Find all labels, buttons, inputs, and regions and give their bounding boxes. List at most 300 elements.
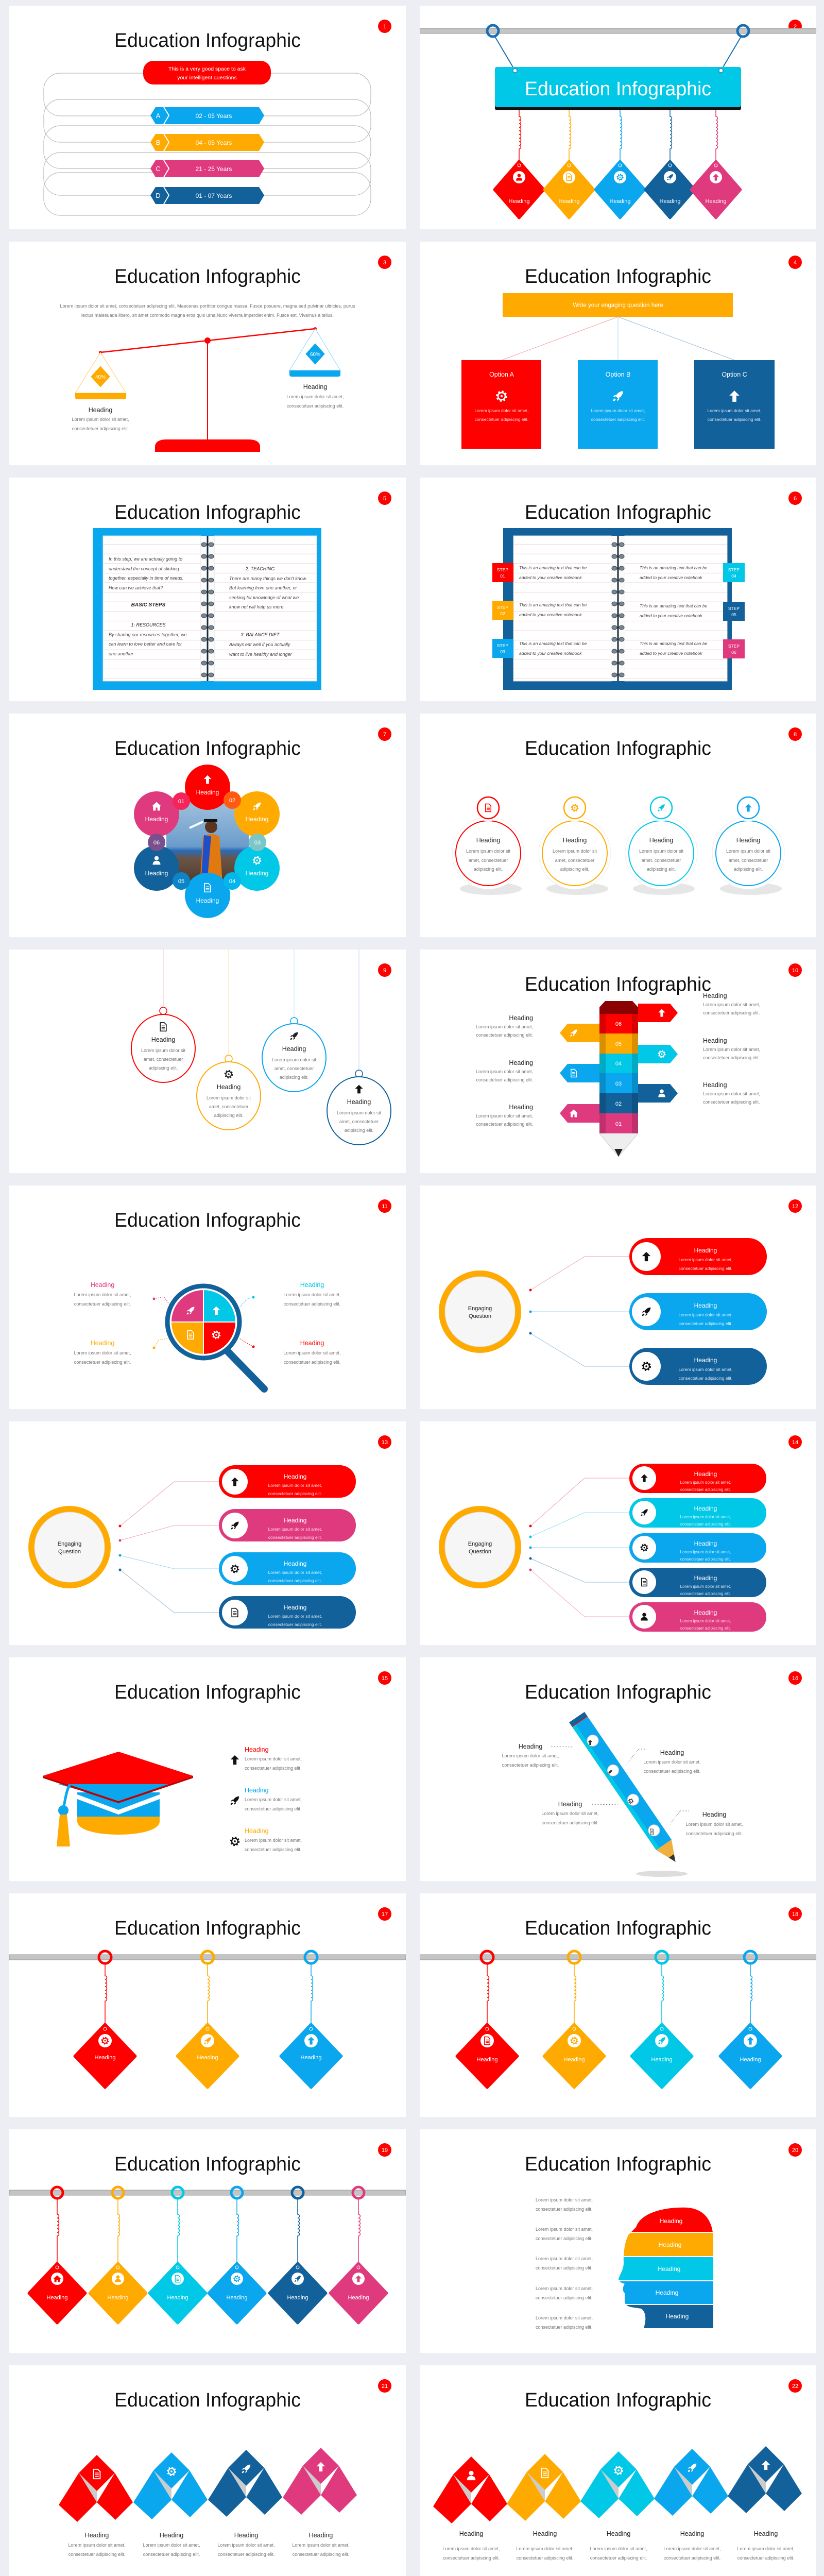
hanging circle 4 dark blue: amet, consectetuer	[339, 1119, 379, 1124]
captions: Lorem ipsum dolor sit amet,	[737, 2546, 795, 2551]
pencil body: 05	[615, 1041, 622, 1047]
rod	[9, 1955, 406, 1960]
title: Education Infographic	[525, 266, 711, 287]
label C: 21 - 25 Years	[196, 165, 232, 173]
step texts: This is an amazing text that can be	[640, 641, 708, 646]
tag 1 red	[494, 110, 544, 218]
callout left 2: Lorem ipsum dolor sit amet,	[541, 1811, 599, 1816]
tag blue: Heading	[301, 2055, 321, 2061]
label A	[150, 107, 264, 124]
connector lines	[502, 317, 734, 360]
intro paragraph: lectus malesuada libero, sit amet commodo magna eros quis urna.Nunc viverra imperdiet enim. Fusce est. Vivamus a tellus.	[81, 313, 334, 318]
slide 9: hanging circles	[9, 950, 406, 1173]
question circle	[439, 1270, 521, 1353]
badge 5: 5	[383, 496, 386, 502]
captions: Heading	[160, 2532, 183, 2539]
pill 3 light blue: consectetuer adipiscing elit.	[268, 1578, 322, 1583]
pencil	[569, 1712, 683, 1867]
hanging circle 4 dark blue: Lorem ipsum dolor sit	[337, 1110, 382, 1115]
pill 5 pink: consectetuer adipiscing elit.	[680, 1626, 731, 1631]
notebook	[93, 528, 321, 690]
circle card 4 blue: Lorem ipsum dolor sit	[726, 849, 771, 854]
step texts: added to your creative notebook	[640, 575, 702, 580]
step tabs right: STEP	[728, 606, 740, 611]
pill 2 cyan	[629, 1498, 766, 1528]
badge 9: 9	[383, 968, 386, 974]
petal right-top orange	[234, 791, 280, 837]
badge 16	[788, 1671, 802, 1685]
slide 22: five ribbons	[420, 2365, 816, 2576]
step tabs left: 01	[500, 573, 505, 579]
petal top red	[185, 765, 230, 810]
hanging circle 3 blue	[262, 950, 326, 1092]
pencil shadow	[636, 1871, 688, 1877]
title: Education Infographic	[114, 2154, 301, 2175]
captions: consectetuer adipiscing elit.	[68, 2552, 125, 2557]
step tabs right: 04	[731, 573, 736, 579]
question pill: This is a very good space to ask	[168, 66, 246, 72]
captions: consectetuer adipiscing elit.	[664, 2555, 720, 2561]
captions: consectetuer adipiscing elit.	[293, 2552, 349, 2557]
hanging circle 1 red	[131, 950, 195, 1082]
pill 4 dark blue: Heading	[694, 1574, 717, 1582]
pill 2 pink: Lorem ipsum dolor sit amet,	[268, 1527, 322, 1532]
captions: Heading	[533, 2530, 557, 2537]
right page text: want to live healthy and longer	[229, 652, 293, 657]
left texts	[476, 1014, 533, 1127]
pill 4 dark blue: Lorem ipsum dolor sit amet,	[680, 1584, 731, 1589]
circle card 2 orange	[539, 794, 611, 895]
pill 3 light blue	[629, 1533, 766, 1563]
step texts	[519, 565, 708, 656]
option B: consectetuer adipiscing elit.	[591, 417, 645, 422]
callout right 2: Heading	[702, 1811, 726, 1818]
pill 3 light blue: Heading	[694, 1540, 717, 1547]
item 2	[231, 1787, 302, 1811]
label B	[150, 134, 264, 151]
step texts: This is an amazing text that can be	[640, 603, 708, 608]
hanging circle 1 red: amet, consectetuer	[144, 1057, 183, 1062]
callout right 1	[626, 1749, 701, 1774]
tag cyan	[631, 1951, 692, 2088]
title: Education Infographic	[525, 2154, 711, 2175]
pill 4 dark blue: consectetuer adipiscing elit.	[680, 1591, 731, 1596]
pill 4 dark blue: consectetuer adipiscing elit.	[268, 1622, 322, 1627]
badge 1: 1	[383, 24, 386, 30]
slide 12: engaging question 3	[420, 1185, 816, 1409]
pill 2 light blue	[629, 1293, 767, 1330]
step texts: This is an amazing text that can be	[519, 641, 587, 646]
scale beam and stand	[99, 327, 317, 452]
captions: Lorem ipsum dolor sit amet,	[516, 2546, 574, 2551]
side texts: Lorem ipsum dolor sit amet,	[536, 2256, 593, 2261]
petal left-top pink: Heading	[145, 816, 168, 823]
slide 17: three hanging tags	[9, 1893, 406, 2117]
callout right 1: Lorem ipsum dolor sit amet,	[643, 1759, 701, 1765]
captions	[68, 2532, 350, 2557]
slide 4: question options	[420, 242, 816, 465]
option C: consectetuer adipiscing elit.	[708, 417, 761, 422]
captions: Heading	[680, 2530, 704, 2537]
right pan 60%: Heading	[303, 383, 327, 391]
badge 9	[378, 963, 391, 977]
tag 6 pink: Heading	[348, 2295, 369, 2301]
title: Education Infographic	[114, 1682, 301, 1703]
option A: Lorem ipsum dolor sit amet,	[475, 408, 528, 413]
circle card 4 blue: amet, consectetuer	[729, 858, 768, 863]
head bands: Heading	[658, 2265, 680, 2273]
hanging circle 3 blue: Heading	[282, 1045, 306, 1053]
pill 4 dark blue	[629, 1568, 766, 1597]
badge 15: 15	[382, 1675, 388, 1682]
badge 1	[378, 20, 391, 33]
badge 17	[378, 1907, 391, 1921]
title: Education Infographic	[525, 738, 711, 759]
pill 1 red	[629, 1464, 766, 1493]
photo graduate	[166, 801, 249, 884]
badge 22: 22	[792, 2383, 798, 2389]
head bands: Heading	[656, 2289, 678, 2296]
captions: consectetuer adipiscing elit.	[218, 2552, 274, 2557]
label C	[150, 160, 264, 177]
pill 5 pink	[629, 1602, 766, 1632]
slide 3: balance scale	[9, 242, 406, 465]
callout right 2: Lorem ipsum dolor sit amet,	[685, 1822, 743, 1827]
hanging circle 1 red: adipiscing elit.	[149, 1065, 178, 1071]
badge 16: 16	[792, 1675, 798, 1682]
slide 11: magnifier puzzle	[9, 1185, 406, 1409]
left pan 40%: 40%	[95, 375, 106, 380]
pill 4 dark blue	[219, 1596, 356, 1629]
item 3	[231, 1827, 302, 1852]
circle card 2 orange: adipiscing elit.	[560, 867, 589, 872]
title: Education Infographic	[114, 1918, 301, 1939]
item 3: Lorem ipsum dolor sit amet,	[245, 1838, 302, 1843]
pill 1 red: Lorem ipsum dolor sit amet,	[680, 1480, 731, 1485]
slide 7: flower with photo	[9, 714, 406, 937]
step tabs left	[492, 563, 513, 658]
title: Education Infographic	[525, 502, 711, 523]
circle card 1 red	[452, 794, 524, 895]
tag 2 orange	[544, 110, 594, 218]
magnifier	[167, 1286, 264, 1389]
left page text: one another	[109, 651, 134, 656]
side texts: Lorem ipsum dolor sit amet,	[536, 2197, 593, 2202]
captions: Heading	[85, 2532, 109, 2539]
captions: Lorem ipsum dolor sit amet,	[442, 2546, 500, 2551]
captions: consectetuer adipiscing elit.	[443, 2555, 500, 2561]
number bubbles: 05	[178, 878, 184, 885]
ribbon 3 cyan	[580, 2451, 655, 2518]
right texts: consectetuer adipiscing elit.	[703, 1055, 760, 1060]
circle card 1 red: Lorem ipsum dolor sit	[466, 849, 511, 854]
text top-right: Heading	[300, 1281, 324, 1289]
circle card 3 cyan: adipiscing elit.	[647, 867, 676, 872]
number bubbles: 02	[229, 798, 235, 804]
captions: Heading	[459, 2530, 483, 2537]
petal bottom blue	[185, 873, 230, 918]
tag 1 red: Heading	[47, 2295, 67, 2301]
ribbon 3 dark blue	[208, 2450, 282, 2517]
captions: consectetuer adipiscing elit.	[737, 2555, 794, 2561]
circle card 4 blue: Heading	[736, 837, 760, 844]
left pan 40%: Lorem ipsum dolor sit amet,	[72, 417, 129, 422]
petal right-bottom cyan: Heading	[246, 870, 268, 877]
hanging circle 2 orange	[197, 950, 261, 1130]
tag orange: Heading	[197, 2055, 218, 2061]
pill 1 red	[629, 1238, 767, 1275]
text top-right: consectetuer adipiscing elit.	[284, 1301, 340, 1307]
right pan 60%: consectetuer adipiscing elit.	[287, 403, 344, 409]
left texts: consectetuer adipiscing elit.	[476, 1077, 533, 1082]
badge 10: 10	[792, 968, 798, 974]
right page text: But learning from one another, or	[229, 585, 298, 590]
step texts: added to your creative notebook	[640, 651, 702, 656]
tag 4 blue	[209, 2187, 265, 2323]
left page text: In this step, we are actually going to	[109, 556, 182, 562]
callout right 1: consectetuer adipiscing elit.	[644, 1769, 700, 1774]
hanging circle 1 red: Lorem ipsum dolor sit	[141, 1048, 186, 1053]
pencil body: 06	[615, 1021, 622, 1027]
captions: Heading	[309, 2532, 333, 2539]
connectors	[529, 1478, 629, 1617]
option A: Option A	[489, 371, 514, 378]
right texts: Lorem ipsum dolor sit amet,	[703, 1002, 760, 1007]
step texts: added to your creative notebook	[519, 651, 582, 656]
connectors	[118, 1482, 219, 1613]
question circle: Engaging	[468, 1306, 492, 1312]
head bands: Heading	[660, 2217, 682, 2225]
badge 10	[788, 963, 802, 977]
right texts: consectetuer adipiscing elit.	[703, 1099, 760, 1105]
tag red: Heading	[477, 2057, 497, 2063]
right texts: Heading	[703, 1037, 727, 1044]
rod	[420, 1955, 816, 1960]
step texts: This is an amazing text that can be	[519, 565, 587, 570]
captions	[442, 2530, 795, 2561]
right page text: 3: BALANCE DIET	[241, 632, 280, 637]
title: Education Infographic	[114, 502, 301, 523]
captions: Lorem ipsum dolor sit amet,	[143, 2543, 200, 2548]
hanging circle 3 blue: adipiscing elit.	[280, 1075, 308, 1080]
tag 3 cyan: Heading	[167, 2295, 188, 2301]
badge 7	[378, 727, 391, 741]
slide 20: head profile	[420, 2129, 816, 2353]
step tabs right: STEP	[728, 643, 740, 649]
item 1	[231, 1746, 302, 1771]
arrow tabs left	[560, 1024, 599, 1123]
pill 1 red	[219, 1465, 356, 1498]
tag orange	[544, 1951, 605, 2088]
callout left 1: Heading	[519, 1743, 542, 1750]
pill 3 light blue: Lorem ipsum dolor sit amet,	[680, 1550, 731, 1554]
pencil body: 03	[615, 1081, 622, 1087]
callout left 2: consectetuer adipiscing elit.	[542, 1820, 598, 1825]
pencil body	[599, 1001, 638, 1157]
number bubbles: 01	[178, 799, 184, 805]
step tabs right: 06	[731, 650, 736, 655]
badge 21	[378, 2379, 391, 2393]
ribbon 2 blue	[133, 2452, 208, 2519]
sign board with title	[495, 67, 741, 110]
pill 2 pink: consectetuer adipiscing elit.	[268, 1535, 322, 1540]
right texts	[703, 992, 760, 1105]
callout left 2: Heading	[558, 1801, 582, 1808]
side texts: consectetuer adipiscing elit.	[536, 2236, 593, 2241]
left texts: Heading	[509, 1104, 533, 1111]
circle card 4 blue: adipiscing elit.	[734, 867, 763, 872]
item 1: Heading	[245, 1746, 269, 1753]
stacked outline bands	[44, 73, 371, 215]
hanging circle 2 orange: adipiscing elit.	[214, 1113, 243, 1118]
badge 19	[378, 2143, 391, 2157]
head bands: Heading	[666, 2313, 689, 2320]
tag red	[457, 1951, 518, 2088]
item 3: consectetuer adipiscing elit.	[245, 1847, 302, 1852]
pill 1 red: Heading	[694, 1470, 717, 1478]
captions: Lorem ipsum dolor sit amet,	[217, 2543, 275, 2548]
petal right-bottom cyan	[234, 845, 280, 891]
side texts: consectetuer adipiscing elit.	[536, 2325, 593, 2330]
tag red: Heading	[95, 2055, 115, 2061]
circle card 3 cyan: amet, consectetuer	[642, 858, 681, 863]
badge 7: 7	[383, 732, 386, 738]
right page text: know not will help us more	[229, 604, 284, 609]
ribbon 4 blue	[654, 2449, 728, 2516]
badge 11	[378, 1199, 391, 1213]
tag 4 dark blue: Heading	[660, 198, 680, 205]
pill 5 pink: Heading	[694, 1609, 717, 1616]
left page text: understand the concept of sticking	[109, 566, 179, 571]
pill 3 dark blue	[629, 1348, 767, 1385]
arrow tabs right	[638, 1004, 678, 1103]
slide 16: diagonal pencil	[420, 1657, 816, 1881]
slide 19: six hanging tags	[9, 2129, 406, 2353]
left page text: By sharing our resources together, we	[109, 632, 187, 637]
left pan 40%	[72, 352, 129, 431]
item 2: Heading	[245, 1787, 269, 1794]
side texts: consectetuer adipiscing elit.	[536, 2265, 593, 2270]
circle card 4 blue	[712, 794, 784, 895]
number bubbles: 04	[229, 878, 235, 885]
badge 3	[378, 256, 391, 269]
head bands	[619, 2207, 713, 2328]
step texts: This is an amazing text that can be	[519, 602, 587, 607]
step tabs left: 02	[500, 611, 505, 616]
callout left 1	[502, 1743, 574, 1768]
left page text: can learn to love better and care for	[109, 641, 182, 647]
pill 3 light blue	[219, 1552, 356, 1585]
left page text	[109, 556, 187, 656]
captions: consectetuer adipiscing elit.	[590, 2555, 647, 2561]
badge 14: 14	[792, 1439, 798, 1446]
pill 2 pink: Heading	[284, 1517, 306, 1524]
tag 1 red	[29, 2187, 85, 2323]
badge 18	[788, 1907, 802, 1921]
question bar	[503, 293, 733, 317]
left pan 40%: Heading	[89, 406, 112, 414]
ribbon 4 pink	[283, 2448, 357, 2515]
circle card 1 red: Heading	[476, 837, 500, 844]
question pill: your intelligent questions	[177, 75, 237, 81]
circle card 1 red: amet, consectetuer	[469, 858, 508, 863]
label B: 04 - 05 Years	[196, 139, 232, 146]
pill 3 dark blue: Lorem ipsum dolor sit amet,	[679, 1367, 732, 1372]
left texts: Heading	[509, 1014, 533, 1022]
question pill	[143, 61, 271, 84]
tag blue	[281, 1951, 341, 2088]
label D	[150, 187, 264, 204]
badge 18: 18	[792, 1911, 798, 1918]
tag 6 pink	[330, 2187, 387, 2323]
slide 10: pencil stack	[420, 950, 816, 1173]
badge 12: 12	[792, 1204, 798, 1210]
circle card 2 orange: Heading	[563, 837, 587, 844]
pill 2 light blue: consectetuer adipiscing elit.	[679, 1321, 732, 1326]
pill 1 red: consectetuer adipiscing elit.	[679, 1266, 732, 1271]
badge 2	[788, 20, 802, 33]
tag orange	[177, 1951, 238, 2088]
badge 4	[788, 256, 802, 269]
option B: Option B	[606, 371, 630, 378]
left texts: consectetuer adipiscing elit.	[476, 1032, 533, 1038]
rod	[9, 2190, 406, 2195]
badge 17: 17	[382, 1911, 388, 1918]
step tabs left: STEP	[497, 567, 508, 572]
tag 5 dark blue: Heading	[287, 2295, 308, 2301]
badge 8: 8	[794, 732, 797, 738]
badge 6	[788, 492, 802, 505]
captions: Heading	[754, 2530, 778, 2537]
item 2: Lorem ipsum dolor sit amet,	[245, 1797, 302, 1802]
pill 2 cyan: consectetuer adipiscing elit.	[680, 1522, 731, 1527]
badge 3: 3	[383, 260, 386, 266]
left texts: Lorem ipsum dolor sit amet,	[476, 1069, 533, 1074]
text top-left: Lorem ipsum dolor sit amet,	[74, 1292, 131, 1297]
question circle: Question	[58, 1549, 81, 1555]
circle card 1 red: adipiscing elit.	[474, 867, 503, 872]
slide 15: graduation cap	[9, 1657, 406, 1881]
option C: Lorem ipsum dolor sit amet,	[708, 408, 761, 413]
tag 2 orange	[90, 2187, 146, 2323]
item 1: consectetuer adipiscing elit.	[245, 1766, 302, 1771]
petal left-top pink	[134, 791, 179, 837]
step tabs right: STEP	[728, 567, 740, 572]
tag red	[75, 1951, 135, 2088]
side texts	[536, 2197, 593, 2330]
ribbon 2 orange	[507, 2454, 581, 2521]
step texts: added to your creative notebook	[519, 612, 582, 617]
label D: D	[156, 192, 161, 199]
tag 2 orange: Heading	[559, 198, 579, 205]
circle card 3 cyan: Lorem ipsum dolor sit	[639, 849, 684, 854]
sign board with title: Education Infographic	[525, 78, 711, 100]
circle card 2 orange: amet, consectetuer	[555, 858, 594, 863]
number bubbles: 06	[153, 840, 160, 846]
title: Education Infographic	[114, 30, 301, 52]
question circle: Question	[469, 1313, 491, 1319]
captions: consectetuer adipiscing elit.	[143, 2552, 200, 2557]
option C	[694, 360, 775, 449]
right page text	[229, 566, 307, 657]
notebook	[503, 528, 732, 690]
text bottom-left: Heading	[91, 1340, 114, 1347]
hanging circle 3 blue: Lorem ipsum dolor sit	[272, 1057, 317, 1062]
right page text: There are many things we don't know.	[229, 576, 307, 581]
pencil body: 02	[615, 1101, 622, 1107]
badge 6: 6	[794, 496, 797, 502]
hanging circle 2 orange: amet, consectetuer	[209, 1104, 248, 1109]
